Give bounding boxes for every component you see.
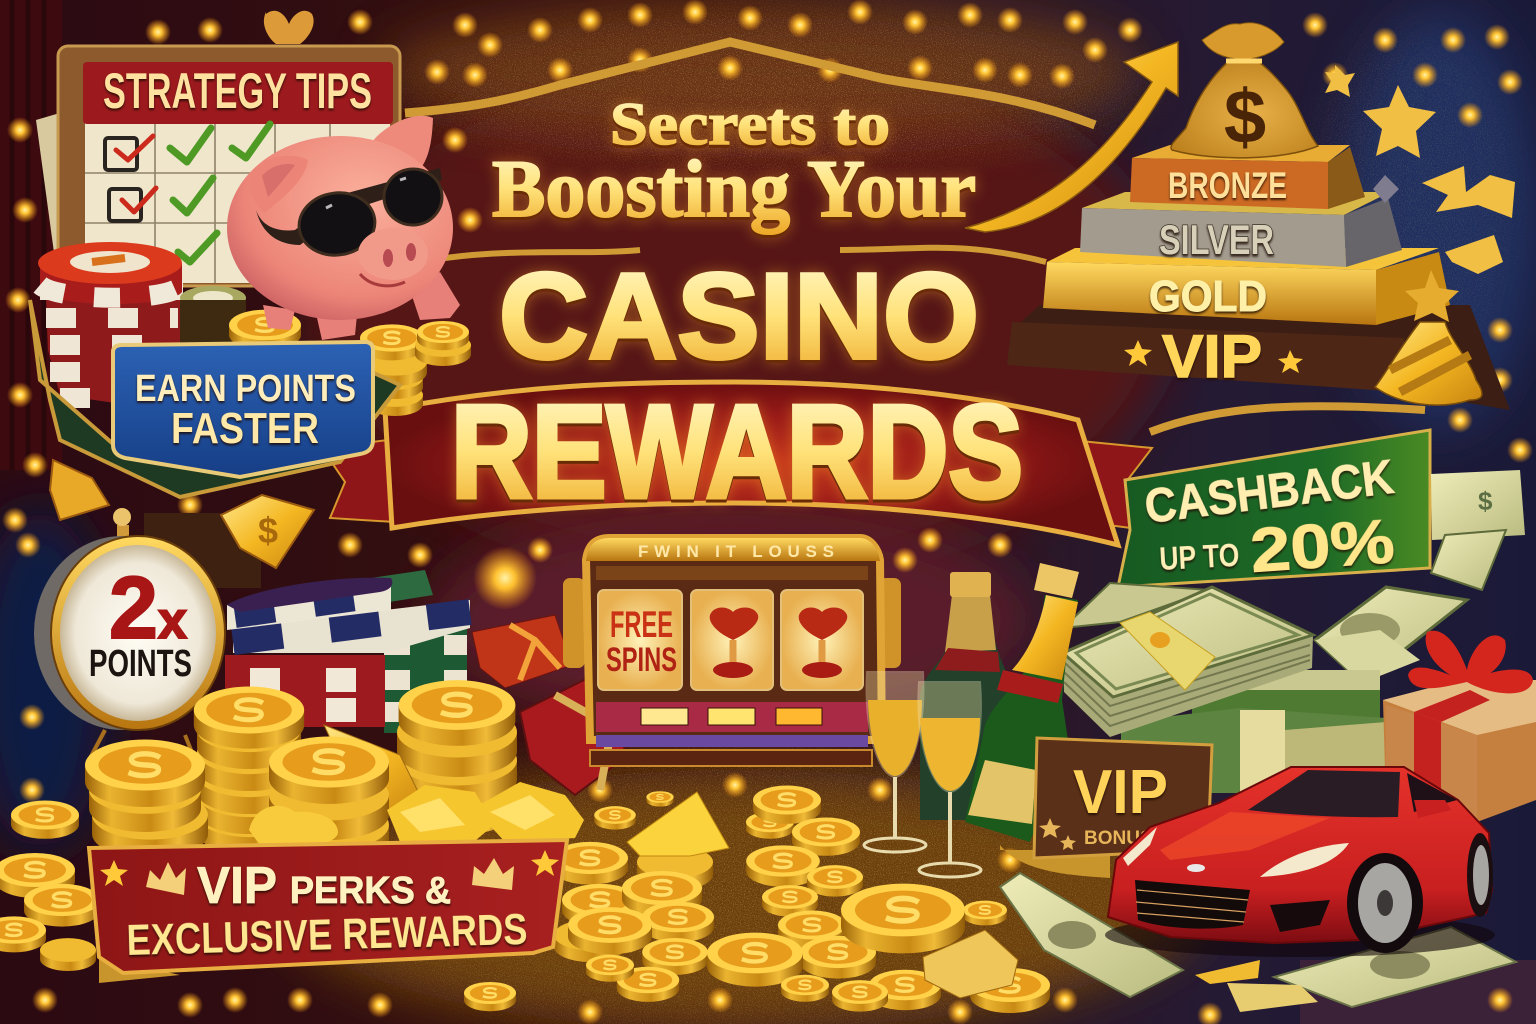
upper gift <box>472 615 572 688</box>
money bag: $ <box>1224 75 1266 160</box>
cashback sign <box>1118 430 1430 587</box>
large bottle <box>965 563 1079 842</box>
checklist marks <box>105 124 270 262</box>
reel free spins <box>598 590 682 690</box>
car grille and headlights <box>1135 880 1250 929</box>
vip sign text: VIP <box>1073 758 1168 827</box>
car side window and mirror <box>1407 773 1457 812</box>
mid green stack <box>1192 670 1380 727</box>
top arch ornament <box>405 42 1425 432</box>
bronze tier: BRONZE <box>1168 165 1287 206</box>
pig left ear <box>250 156 308 213</box>
gold stars and paper planes <box>1325 65 1515 274</box>
silver tier <box>1080 192 1402 267</box>
pig snout <box>358 228 428 280</box>
money bag <box>1171 23 1318 160</box>
bottom bills <box>1000 873 1183 997</box>
earn points text: EARN POINTS <box>135 368 356 410</box>
lower gift <box>520 677 632 795</box>
stack c <box>269 800 389 870</box>
reel free spins: SPINS <box>606 641 677 679</box>
exclusive rewards line: EXCLUSIVE REWARDS <box>126 905 528 965</box>
points label: POINTS <box>89 643 192 685</box>
gift boxes center <box>472 615 632 795</box>
cashback sign: UP TO <box>1158 537 1240 577</box>
strategy tips heading: STRATEGY TIPS <box>103 63 372 119</box>
money stacks: $ <box>1478 486 1493 516</box>
poker chip stack left <box>38 242 471 416</box>
pig feet <box>263 272 460 340</box>
small gold tags left: $ <box>258 510 278 551</box>
reel heart one <box>691 590 773 690</box>
ribbon right tail <box>1070 440 1152 530</box>
stack b <box>197 793 301 854</box>
cashback sign: 20% <box>1248 507 1397 586</box>
champagne glasses <box>864 672 981 877</box>
crowns and stars <box>146 858 514 895</box>
car windshield <box>1248 770 1400 817</box>
pig body <box>227 136 453 320</box>
title <box>492 91 979 384</box>
cashback text: CASHBACK <box>1142 451 1397 534</box>
nuggets <box>249 806 338 848</box>
car front wheel <box>1347 853 1423 953</box>
slot machine <box>563 538 901 766</box>
stack d <box>397 764 517 835</box>
strategy tips heading <box>83 62 393 124</box>
bronze tier <box>1130 145 1365 209</box>
money stacks <box>1000 470 1525 1012</box>
tier pyramid <box>1007 23 1510 410</box>
bonus sign text: BONUS <box>1084 828 1153 849</box>
piggy bank with sunglasses <box>227 116 460 340</box>
car rear wheel <box>1467 833 1493 917</box>
vip tier: VIP <box>1162 323 1262 390</box>
sunglasses <box>256 165 446 260</box>
vip perks line: VIP PERKS & <box>197 857 451 915</box>
title line: casino: CASINO <box>499 248 979 384</box>
silver tier: SILVER <box>1159 216 1274 263</box>
champagne bottles <box>920 563 1079 842</box>
coin pile bottom left <box>0 680 638 971</box>
red chips <box>225 655 385 727</box>
2x points timer <box>34 508 225 762</box>
car hood highlight <box>1160 812 1330 860</box>
title line: boosting your: Boosting Your <box>492 143 976 234</box>
gift box right <box>1383 631 1536 822</box>
ribbon with rewards <box>322 378 1152 545</box>
2x label: 2x <box>109 558 187 657</box>
slot button panel <box>590 702 872 766</box>
earn points sign <box>113 342 373 477</box>
title line: secrets to: Secrets to <box>610 91 890 157</box>
coin pile center bottom <box>464 786 1050 1013</box>
poker chip stacks center left <box>225 570 470 733</box>
marquee text: FWIN IT LOUSS <box>638 542 834 561</box>
pig right ear <box>372 116 433 172</box>
reel free spins: FREE <box>610 604 673 645</box>
vip bonus sign <box>1000 738 1212 878</box>
top right bills <box>1431 470 1525 540</box>
vip perks banner <box>89 840 567 983</box>
red sports car <box>1105 767 1495 957</box>
gift bow <box>1408 631 1533 693</box>
gold tier <box>1043 248 1450 325</box>
main bill stack <box>1063 635 1313 737</box>
rewards text: REWARDS <box>451 378 1023 525</box>
ribbon left tail <box>322 440 395 522</box>
board clip ornament <box>264 11 314 44</box>
rising gold arrow <box>965 42 1178 232</box>
stack a <box>92 790 208 858</box>
earn points sign: FASTER <box>171 404 319 453</box>
felt panel under earn points <box>30 300 400 497</box>
reel heart two <box>781 590 863 690</box>
strategy tips board <box>36 11 400 286</box>
gold tier: GOLD <box>1149 272 1267 321</box>
ribbon body <box>385 382 1118 545</box>
vip tier <box>1007 305 1510 410</box>
small bottle <box>920 572 1012 820</box>
small gold tags left <box>50 460 314 588</box>
lower bill stack <box>1121 708 1386 793</box>
small gold bag with star <box>1375 270 1482 405</box>
navy and white chips <box>233 600 470 653</box>
green chips <box>324 570 433 610</box>
